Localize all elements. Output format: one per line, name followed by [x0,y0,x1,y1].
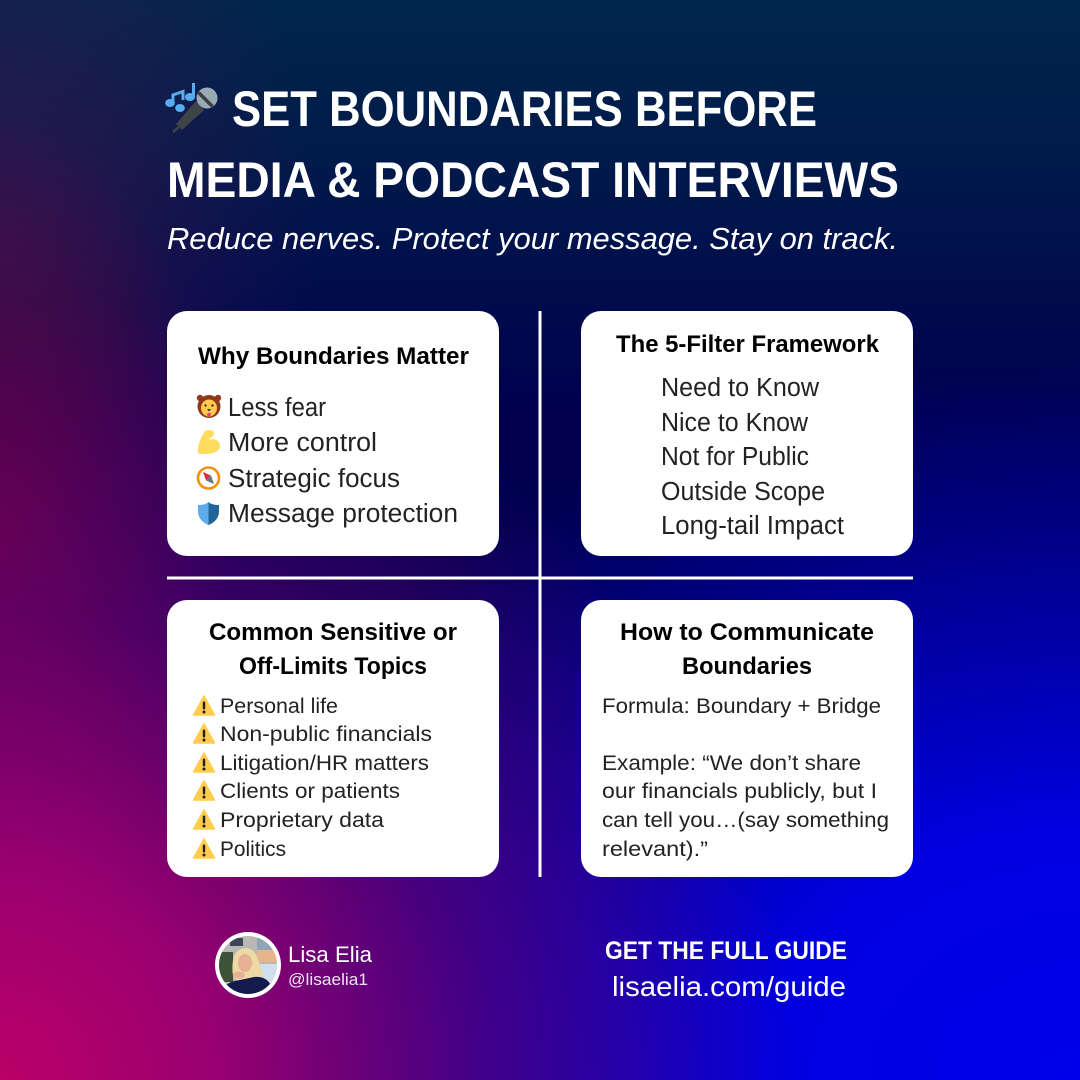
filter list: Nice to Know [661,409,809,437]
filter list [661,374,844,540]
panel: how to communicate boundaries [581,600,913,877]
heading: common sensitive or off-limits topics [209,619,457,680]
warning list: Personal life [220,694,338,718]
filter list: Not for Public [661,443,809,471]
panel: why boundaries matter [167,311,499,556]
title line 1: SET BOUNDARIES BEFORE [232,81,817,137]
horizontal divider [167,576,913,580]
formula: Formula: Boundary + Bridge [602,694,881,718]
avatar photo [215,932,281,998]
heading: how to communicate boundaries [620,619,874,680]
icon: microphone with music notes [165,83,218,132]
item: strategic focus: Strategic focus [228,465,400,493]
call to action [605,937,847,1002]
filter list: Outside Scope [661,478,825,506]
heading: how to communicate boundaries: Boundaries [682,653,812,680]
example [602,751,889,861]
title line 2: MEDIA & PODCAST INTERVIEWS [167,152,899,208]
item: more control: More control [228,429,377,457]
author handle: @lisaelia1 [288,970,368,989]
heading: common sensitive or off-limits topics: Off-Limits Topics [239,653,427,680]
panel: the 5-filter framework [581,311,913,556]
author name: Lisa Elia [288,942,373,967]
filter list: Long-tail Impact [661,512,844,540]
example: can tell you…(say something [602,808,889,832]
vertical divider [538,311,542,877]
icon: shield [198,502,219,525]
warning list: Non-public financials [220,722,432,746]
example: Example: “We don’t share [602,751,861,775]
warning list [194,694,432,861]
cta link: lisaelia.com/guide [612,971,846,1002]
item: less fear: Less fear [228,394,326,422]
icon: compass [198,468,219,488]
heading: why boundaries matter: Why Boundaries Matter [198,343,469,370]
cta heading: GET THE FULL GUIDE [605,937,847,965]
icon: lion [197,395,221,418]
subtitle: Reduce nerves. Protect your message. Stay on track. [167,221,898,256]
title [165,81,899,208]
example: relevant).” [602,837,708,861]
author block [215,932,373,998]
item: message protection: Message protection [228,500,458,528]
warning list: Proprietary data [220,808,384,832]
heading: how to communicate boundaries: How to Communicate [620,619,874,646]
panel: common sensitive or off-limits topics [167,600,499,877]
heading: the 5-filter framework: The 5-Filter Framework [616,331,879,358]
warning list: Clients or patients [220,779,400,803]
filter list: Need to Know [661,374,820,402]
warning list: Politics [220,837,286,861]
warning list: Litigation/HR matters [220,751,429,775]
icon: flexed biceps [198,430,220,454]
heading: common sensitive or off-limits topics: Common Sensitive or [209,619,457,646]
example: our financials publicly, but I [602,779,877,803]
